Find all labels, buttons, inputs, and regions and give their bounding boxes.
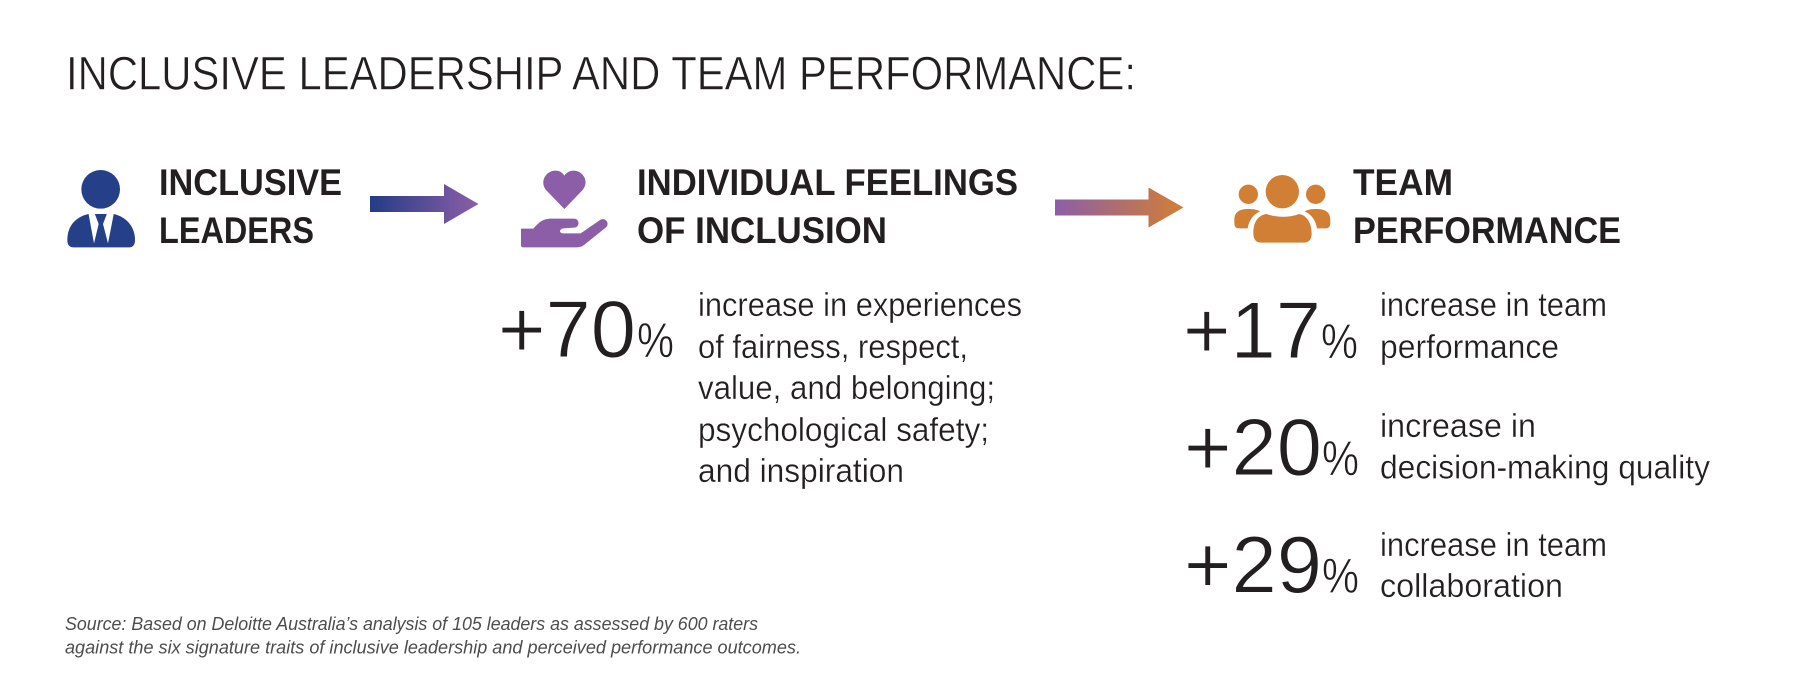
text: +29% description — [1380, 526, 1607, 604]
heading: individual feelings of inclusion — [637, 162, 1018, 251]
icon: team — [1234, 175, 1330, 243]
source note: Source: Based on Deloitte Australia’s analysis of 105 leaders as assessed by 600 raters — [65, 614, 758, 634]
stat: +17%: +17 — [1183, 286, 1321, 376]
text: +17% description: performance — [1380, 328, 1559, 365]
text: +29% description: collaboration — [1380, 567, 1563, 604]
text: +70% description — [698, 286, 1022, 489]
heading: team performance: PERFORMANCE — [1353, 210, 1621, 251]
stat: +29%: % — [1322, 550, 1359, 604]
stat: +20%: % — [1322, 432, 1359, 486]
heading: inclusive leaders: LEADERS — [159, 210, 314, 251]
text: +17% description — [1380, 286, 1607, 365]
arrow: inclusion to performance — [1055, 188, 1184, 228]
source note: against the six signature traits of inclusive leadership and perceived performance outcomes. — [65, 638, 801, 658]
heading: inclusive leaders — [159, 162, 342, 251]
text: +70% description: increase in experiences — [698, 286, 1022, 323]
stat: +70%: % — [637, 314, 674, 368]
icon: heart in hand — [521, 171, 608, 247]
text: +17% description: increase in team — [1380, 286, 1607, 323]
heading: inclusive leaders: INCLUSIVE — [159, 162, 342, 203]
stat: +17%: % — [1321, 315, 1358, 369]
title: INCLUSIVE LEADERSHIP AND TEAM PERFORMANCE: — [66, 46, 1136, 100]
text: +70% description: and inspiration — [698, 452, 904, 489]
text: +20% description: increase in — [1380, 407, 1536, 444]
stat: +20%: +20 — [1184, 403, 1322, 493]
text: +29% description: increase in team — [1380, 526, 1607, 563]
stat: +70%: +70 — [498, 285, 636, 375]
text: +20% description — [1380, 407, 1710, 486]
heading: team performance — [1353, 162, 1621, 251]
heading: individual feelings of inclusion: OF INCLUSION — [637, 210, 887, 251]
text: +70% description: value, and belonging; — [698, 369, 995, 406]
source note — [65, 614, 801, 658]
text: +20% description: decision-making quality — [1380, 448, 1710, 486]
arrow: leaders to inclusion — [370, 184, 478, 224]
heading: team performance: TEAM — [1353, 162, 1453, 203]
text: +70% description: psychological safety; — [698, 411, 989, 448]
stat: +29%: +29 — [1184, 520, 1322, 610]
text: +70% description: of fairness, respect, — [698, 328, 968, 365]
icon: leader — [67, 170, 135, 247]
heading: individual feelings of inclusion: INDIVIDUAL FEELINGS — [637, 162, 1018, 203]
